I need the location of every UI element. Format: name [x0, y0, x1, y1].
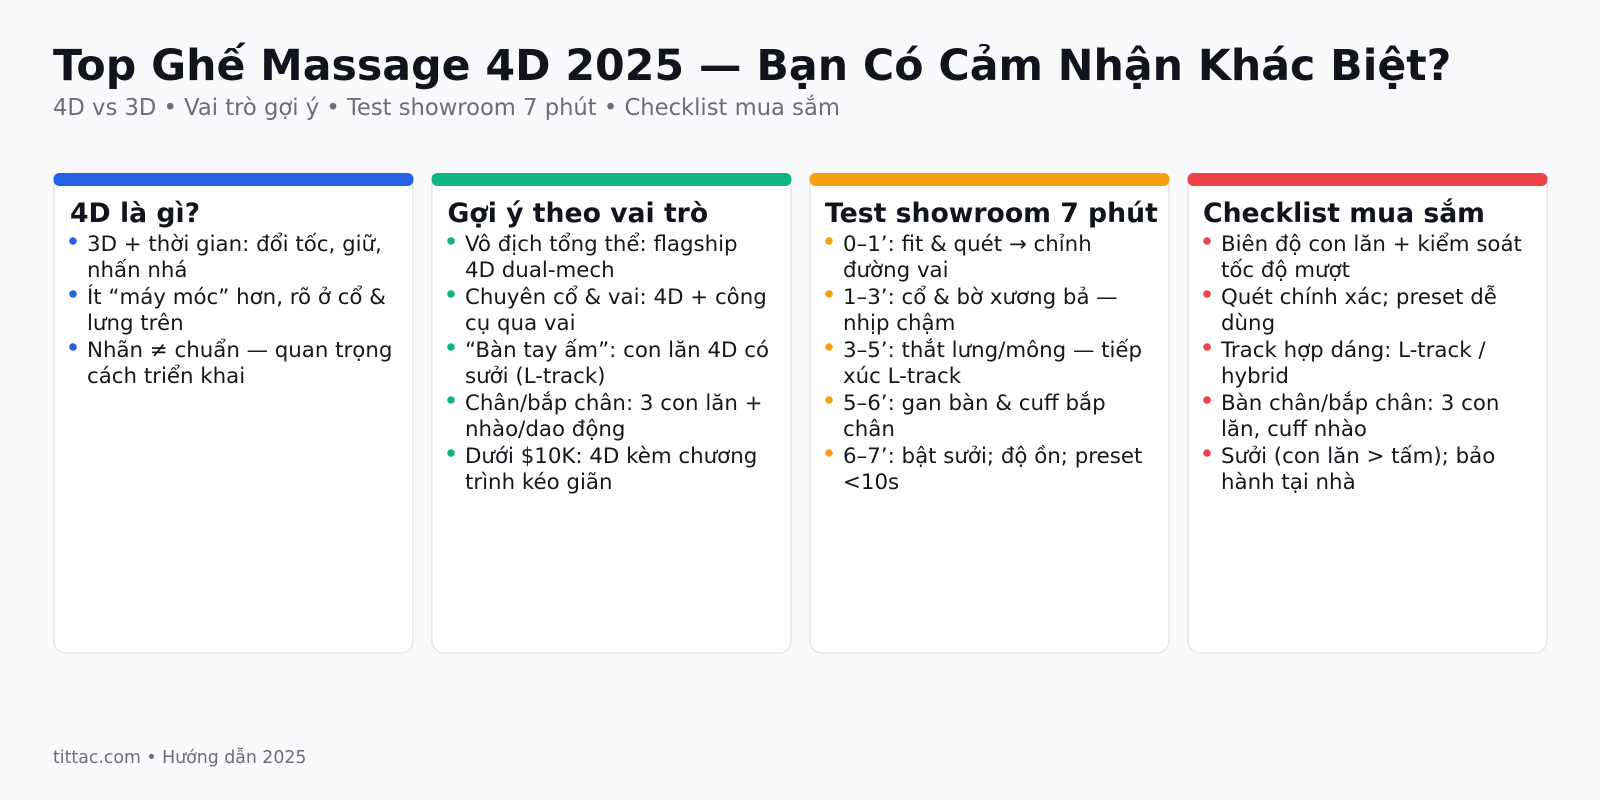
- list: Test showroom 7 phút: 5–6’: gan bàn & cuff bắp: [843, 391, 1106, 416]
- list: Test showroom 7 phút: 3–5’: thắt lưng/mông — tiếp: [843, 338, 1142, 363]
- list: Gợi ý theo vai trò: nhào/dao động: [465, 417, 625, 442]
- list: Gợi ý theo vai trò: sưởi (L-track): [465, 364, 606, 389]
- list: Gợi ý theo vai trò: cụ qua vai: [465, 311, 576, 336]
- list: 4D là gì?: Ít “máy móc” hơn, rõ ở cổ &: [87, 284, 386, 310]
- list: Gợi ý theo vai trò: 4D dual-mech: [465, 258, 615, 283]
- list: Gợi ý theo vai trò: [447, 232, 769, 495]
- list: 4D là gì?: nhấn nhá: [87, 258, 188, 283]
- list: 4D là gì?: 3D + thời gian: đổi tốc, giữ,: [87, 232, 382, 257]
- list: Checklist mua sắm: hybrid: [1221, 364, 1289, 389]
- list: Checklist mua sắm: lăn, cuff nhào: [1221, 417, 1367, 442]
- list: Test showroom 7 phút: đường vai: [843, 258, 949, 283]
- panel: Checklist mua sắm: [1188, 173, 1548, 653]
- list: Test showroom 7 phút: <10s: [843, 470, 899, 495]
- list: Test showroom 7 phút: [825, 232, 1142, 495]
- list: Test showroom 7 phút: 0–1’: fit & quét → chỉnh: [843, 232, 1092, 257]
- heading: Checklist mua sắm: Checklist mua sắm: [1203, 197, 1485, 229]
- title: Top Ghế Massage 4D 2025 — Bạn Có Cảm Nhận Khác Biệt?: [53, 41, 1451, 91]
- heading: 4D là gì?: 4D là gì?: [70, 198, 200, 229]
- list: 4D là gì?: Nhãn ≠ chuẩn — quan trọng: [87, 338, 392, 363]
- heading: Test showroom 7 phút: Test showroom 7 phút: [825, 198, 1158, 229]
- list: Checklist mua sắm: Sưởi (con lăn > tấm); bảo: [1221, 444, 1495, 469]
- panel: 4D là gì?: [54, 173, 414, 653]
- list: Gợi ý theo vai trò: Vô địch tổng thể: flagship: [465, 232, 738, 257]
- list: Gợi ý theo vai trò: Chân/bắp chân: 3 con lăn +: [465, 391, 762, 416]
- list: Test showroom 7 phút: chân: [843, 417, 895, 442]
- list: Checklist mua sắm: Biên độ con lăn + kiểm soát: [1221, 232, 1522, 257]
- footer: tittac.com • Hướng dẫn 2025: [53, 747, 306, 768]
- list: Checklist mua sắm: Bàn chân/bắp chân: 3 con: [1221, 391, 1499, 416]
- list: Test showroom 7 phút: 1–3’: cổ & bờ xương bả —: [843, 285, 1118, 310]
- panel: Gợi ý theo vai trò: [432, 173, 792, 653]
- list: Test showroom 7 phút: xúc L-track: [843, 364, 962, 389]
- heading: Gợi ý theo vai trò: Gợi ý theo vai trò: [448, 198, 708, 229]
- list: Gợi ý theo vai trò: Chuyên cổ & vai: 4D + công: [465, 285, 767, 310]
- list: Test showroom 7 phút: 6–7’: bật sưởi; độ ồn; preset: [843, 444, 1142, 469]
- list: 4D là gì?: [69, 232, 392, 389]
- list: Checklist mua sắm: hành tại nhà: [1221, 470, 1356, 495]
- list: Checklist mua sắm: tốc độ mượt: [1221, 258, 1350, 283]
- list: Gợi ý theo vai trò: Dưới $10K: 4D kèm chương: [465, 444, 757, 469]
- list: 4D là gì?: cách triển khai: [87, 364, 245, 389]
- list: Gợi ý theo vai trò: trình kéo giãn: [465, 470, 612, 495]
- list: Checklist mua sắm: Quét chính xác; preset dễ: [1221, 284, 1497, 310]
- subtitle: 4D vs 3D • Vai trò gợi ý • Test showroom 7 phút • Checklist mua sắm: [53, 94, 840, 121]
- list: Checklist mua sắm: dùng: [1221, 311, 1275, 336]
- list: Gợi ý theo vai trò: “Bàn tay ấm”: con lăn 4D có: [465, 338, 769, 363]
- list: Test showroom 7 phút: nhịp chậm: [843, 311, 955, 336]
- list: 4D là gì?: lưng trên: [87, 311, 184, 336]
- list: Checklist mua sắm: [1203, 232, 1522, 495]
- list: Checklist mua sắm: Track hợp dáng: L-track /: [1220, 338, 1486, 363]
- panel: Test showroom 7 phút: [810, 173, 1170, 653]
